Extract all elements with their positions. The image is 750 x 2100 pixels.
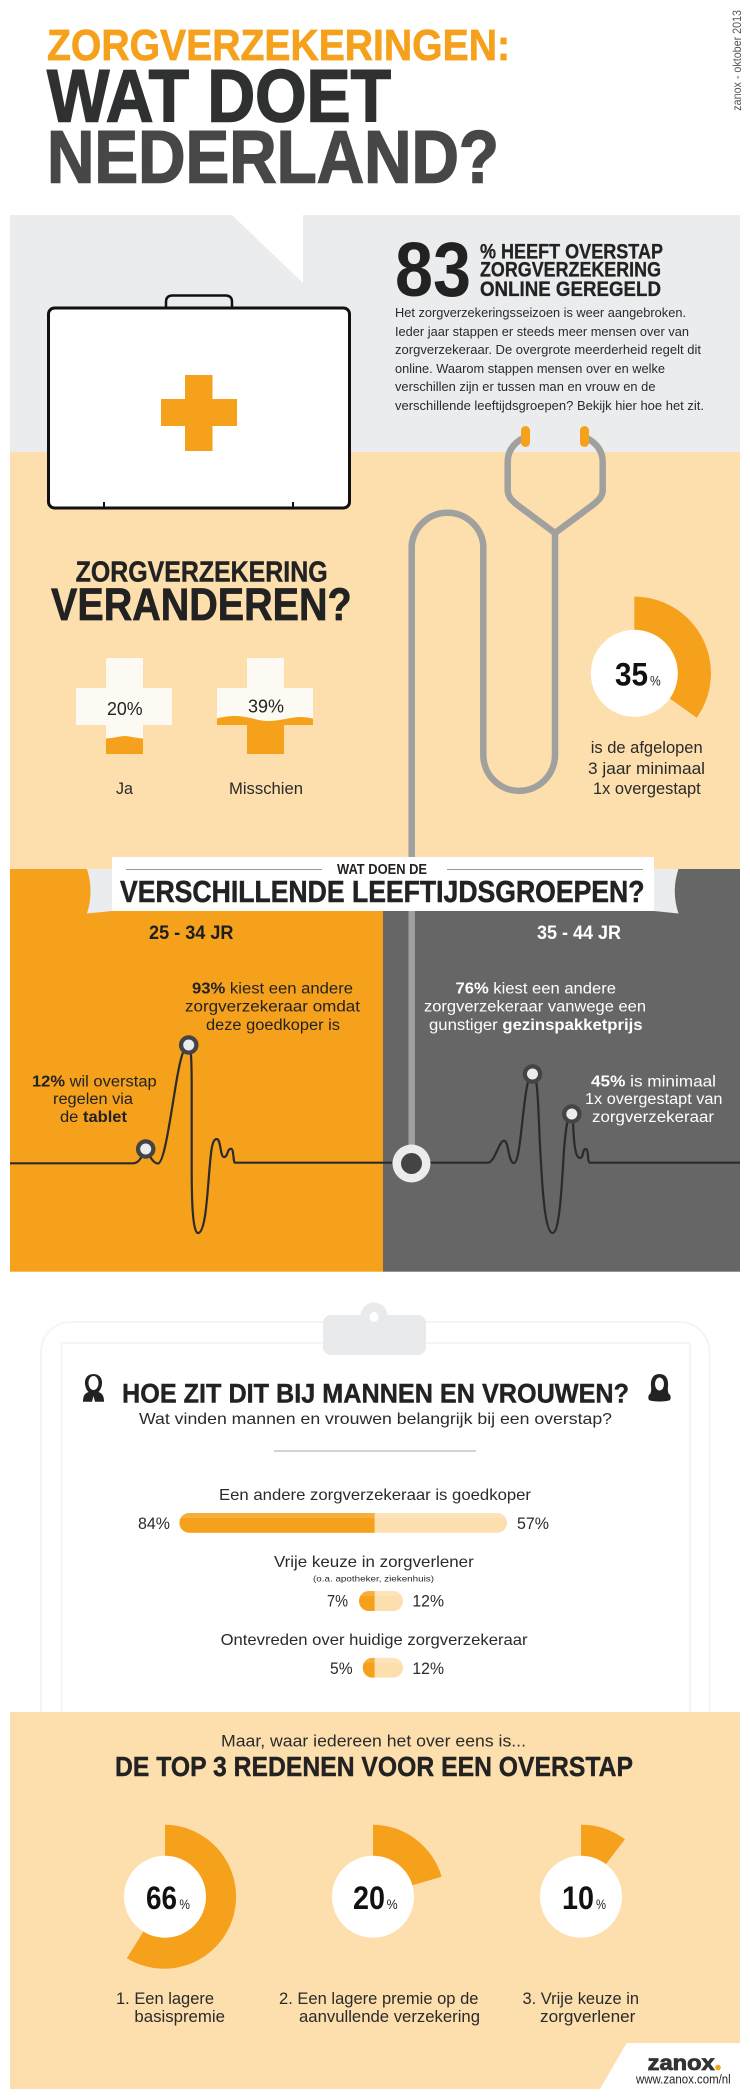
caption: 1x overgestapt [593, 780, 701, 798]
date note: zanox - oktober 2013 [730, 10, 744, 111]
label: Ontevreden over huidige zorgverzekeraar [221, 1632, 528, 1649]
chart: donut 20 percent [279, 1825, 480, 2026]
intro heading [480, 240, 663, 301]
label: Ja [116, 780, 134, 798]
title [47, 22, 510, 199]
heading: DE TOP 3 REDENEN VOOR EEN OVERSTAP [115, 1751, 633, 1782]
icon: first aid kit [48, 296, 350, 508]
callout: 93 percent: deze goedkoper is [206, 1017, 340, 1034]
chart: heartbeat line left [10, 1045, 392, 1233]
label: 3. Vrije keuze in [522, 1990, 639, 2008]
subtitle: Wat vinden mannen en vrouwen belangrijk bij een overstap? [139, 1411, 612, 1428]
chart: donut 35 percent [588, 597, 711, 798]
callout: 45 percent [585, 1074, 722, 1126]
icon: stethoscope [412, 426, 603, 1163]
intro line: Maar, waar iedereen het over eens is... [221, 1733, 526, 1751]
value: 35 [615, 657, 648, 693]
caption: is de afgelopen [591, 739, 703, 757]
title line 1: ZORGVERZEKERINGEN: [47, 22, 510, 70]
values: 84% [138, 1514, 170, 1533]
callout: 12 percent: regelen via [53, 1091, 133, 1108]
chart: donut 66 percent [116, 1825, 236, 2026]
logo: zanox: zanox [648, 2052, 715, 2075]
panel: beige change section [10, 452, 740, 869]
kit handle [166, 296, 232, 308]
icon: stethoscope chest piece [392, 1144, 430, 1182]
bar [359, 1591, 403, 1611]
logo: zanox [635, 2052, 731, 2086]
value: 39% [248, 696, 284, 717]
earpieces [521, 426, 530, 447]
value: 10 [562, 1880, 594, 1916]
banner main line: VERSCHILLENDE LEEFTIJDSGROEPEN? [120, 875, 644, 909]
callout: 93 percent: 93% kiest een andere [192, 980, 353, 997]
intro paragraph: verschillende leeftijdsgroepen? Bekijk hier hoe het zit. [395, 398, 704, 413]
label [522, 1990, 639, 2026]
chart: heartbeat line right [430, 1074, 740, 1233]
chart: donut 66 percent: % [179, 1896, 190, 1912]
callout: 76 percent [424, 980, 646, 1034]
callout: 93 percent [185, 980, 361, 1034]
callout: 12 percent [32, 1074, 157, 1126]
markers on heartbeat lines [136, 1035, 582, 1159]
ribbon tails [87, 869, 112, 914]
value: 20% [107, 698, 143, 719]
heading: zorgverzekering veranderen: ZORGVERZEKERING [76, 557, 328, 589]
chart: donut 10 percent: % [596, 1896, 606, 1912]
bar [179, 1513, 507, 1533]
value: 20 [353, 1880, 385, 1916]
title line 3: NEDERLAND? [47, 116, 499, 199]
intro paragraph: verschillen zijn er tussen man en vrouw en de [395, 379, 656, 394]
intro paragraph: zorgverzekeraar. De overgrote meerderheid regelt dit [395, 342, 701, 357]
label: basispremie [134, 2008, 225, 2026]
intro heading: ZORGVERZEKERING [480, 258, 661, 282]
speech notch [232, 215, 303, 283]
callout: 76 percent: zorgverzekeraar vanwege een [424, 999, 646, 1016]
panel: top 3 reasons [10, 1712, 740, 2089]
label: Een andere zorgverzekeraar is goedkoper [219, 1487, 532, 1504]
intro paragraph [395, 305, 704, 413]
icon: woman [648, 1374, 671, 1402]
panel: intro [10, 215, 740, 452]
chart: vrije keuze bar [274, 1554, 474, 1611]
value: 66 [146, 1880, 177, 1916]
label: aanvullende verzekering [299, 2008, 480, 2026]
label [116, 1990, 225, 2026]
chart: vrije keuze bar: 12% [412, 1592, 444, 1611]
label: Vrije keuze in zorgverlener [274, 1554, 474, 1571]
intro paragraph: Het zorgverzekeringsseizoen is weer aangebroken. [395, 305, 686, 320]
label [279, 1990, 480, 2026]
sublabel: (o.a. apotheker, ziekenhuis) [313, 1575, 434, 1584]
intro heading: % HEEFT OVERSTAP [480, 240, 663, 264]
heading: zorgverzekering veranderen [51, 557, 352, 630]
caption [588, 739, 705, 798]
heading: men and women: HOE ZIT DIT BIJ MANNEN EN VROUWEN? [122, 1378, 629, 1408]
kit body [48, 308, 350, 508]
callout: 45 percent: zorgverzekeraar [592, 1109, 714, 1126]
intro paragraph: online. Waarom stappen mensen over en welke [395, 361, 665, 376]
chart: goedkoper bar [138, 1487, 549, 1533]
chart: donut 20 percent: % [387, 1896, 398, 1912]
kit cross [161, 375, 237, 451]
chart: donut 35 percent: % [650, 673, 661, 689]
intro paragraph: Ieder jaar stappen er steeds meer mensen over van [395, 324, 689, 339]
caption: 3 jaar minimaal [588, 760, 705, 778]
chart: cross 20 percent [76, 658, 172, 798]
icon: man [83, 1374, 104, 1402]
callout: 76 percent: gunstiger gezinspakketprijs [429, 1017, 643, 1034]
chart: ontevreden bar [221, 1632, 528, 1678]
callout: 45 percent: 45% is minimaal [591, 1074, 716, 1091]
callout: 12 percent: 12% wil overstap [32, 1074, 157, 1091]
label: zorgverlener [540, 2008, 636, 2026]
chart: goedkoper bar: 57% [517, 1514, 549, 1533]
intro heading: ONLINE GEREGELD [480, 278, 661, 301]
big number 83: 83 [395, 227, 471, 313]
label: 2. Een lagere premie op de [279, 1990, 478, 2008]
label: age 35-44: 35 - 44 JR [537, 923, 621, 944]
label: age 25-34: 25 - 34 JR [149, 923, 234, 944]
banner: age groups heading [87, 857, 678, 914]
label: 1. Een lagere [116, 1990, 214, 2008]
heading: zorgverzekering veranderen: VERANDEREN? [51, 579, 352, 630]
chart: donut 10 percent [522, 1825, 639, 2026]
values: 7% [327, 1592, 348, 1611]
url: www.zanox.com/nl [635, 2072, 731, 2086]
callout: 45 percent: 1x overgestapt van [585, 1091, 722, 1108]
clip [323, 1302, 426, 1355]
bar [363, 1658, 403, 1678]
values: 5% [330, 1659, 353, 1678]
panel: clipboard [41, 1302, 710, 1742]
title line 2: WAT DOET [47, 55, 391, 138]
panel: age 25-34 [10, 869, 383, 1272]
chart: cross 39 percent [217, 658, 313, 794]
callout: 93 percent: zorgverzekeraar omdat [185, 999, 361, 1016]
panel: age 35-44 [383, 869, 740, 1272]
callout: 76 percent: 76% kiest een andere [456, 980, 616, 997]
callout: 12 percent: de tablet [60, 1109, 127, 1126]
label: Misschien [229, 780, 303, 798]
chart: ontevreden bar: 12% [412, 1659, 444, 1678]
banner small line: WAT DOEN DE [337, 862, 427, 878]
